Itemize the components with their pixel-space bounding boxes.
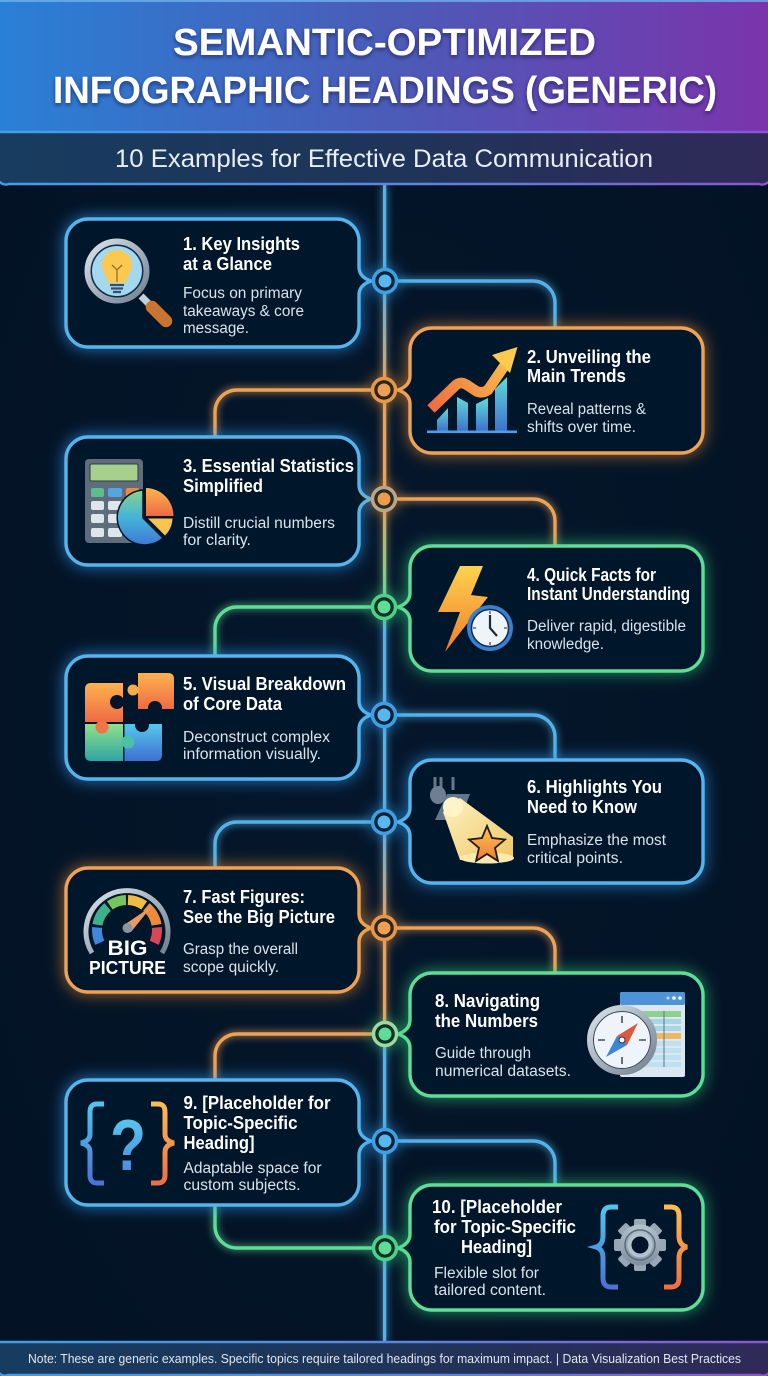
icon: big picture gauge: BIG	[108, 936, 148, 960]
heading 7: See the Big Picture	[183, 906, 335, 927]
heading 8: 8. Navigating	[435, 990, 540, 1011]
heading 8: the Numbers	[435, 1010, 538, 1031]
connector: 5 to 6	[397, 715, 555, 760]
footer band: Note: These are generic examples. Specific topics require tailored headings for maximum impact. | Data Visualization Best Practices	[28, 1351, 741, 1366]
heading 6: Need to Know	[527, 796, 638, 817]
connector: 2 to 3	[215, 390, 372, 437]
connector: 9 to 10	[397, 1141, 555, 1185]
central timeline spine	[383, 185, 386, 1342]
heading 2	[527, 346, 651, 386]
node 2	[372, 378, 396, 402]
header banner	[0, 0, 768, 132]
body 1	[183, 285, 304, 337]
card 4	[398, 546, 703, 671]
heading 1: 1. Key Insights	[183, 233, 300, 254]
subtitle band: 10 Examples for Effective Data Communication	[115, 145, 653, 173]
connector: 7 to 8	[397, 928, 555, 973]
connector: 6 to 7	[215, 822, 372, 868]
heading 2: Main Trends	[527, 365, 626, 386]
branch connectors	[215, 281, 555, 1248]
card 6	[398, 760, 703, 883]
title: INFOGRAPHIC HEADINGS (GENERIC)	[53, 70, 717, 112]
body 8: Guide through	[435, 1045, 531, 1062]
card 5	[66, 656, 371, 779]
body 7: Grasp the overall	[183, 941, 298, 958]
body 9	[184, 1160, 322, 1194]
node 10	[374, 1236, 396, 1260]
node 7	[372, 916, 396, 940]
body 2: Reveal patterns &	[527, 401, 647, 418]
node 9	[374, 1130, 396, 1152]
body 2	[527, 401, 647, 436]
body 7	[183, 941, 298, 976]
icon: gear in braces	[596, 1207, 687, 1287]
heading 10: Heading]	[461, 1236, 532, 1257]
heading 6	[527, 776, 662, 817]
heading 5: 5. Visual Breakdown	[183, 673, 346, 694]
heading 3: Simplified	[183, 475, 263, 496]
body 10: Flexible slot for	[434, 1265, 539, 1282]
card 10	[398, 1185, 703, 1310]
heading 7	[183, 886, 335, 927]
heading 10	[432, 1196, 576, 1257]
card 3	[66, 437, 371, 565]
body 3: Distill crucial numbers	[183, 515, 335, 532]
heading 2: 2. Unveiling the	[527, 346, 651, 367]
card 7	[66, 868, 371, 992]
body 5: Deconstruct complex	[183, 729, 330, 746]
icon: big picture gauge: PICTURE	[89, 958, 166, 978]
body 9: Adaptable space for	[184, 1160, 322, 1177]
icon: big picture gauge	[86, 891, 168, 978]
heading 1: at a Glance	[183, 253, 272, 274]
heading 7: 7. Fast Figures:	[183, 886, 305, 907]
card 8	[398, 973, 703, 1096]
title: SEMANTIC-OPTIMIZED	[173, 22, 596, 64]
heading 10: 10. [Placeholder	[432, 1196, 562, 1217]
body 4: Deliver rapid, digestible	[527, 618, 686, 635]
connector: 1 to 2	[397, 281, 555, 328]
heading 9: Topic-Specific	[184, 1112, 298, 1133]
heading 5: of Core Data	[183, 693, 283, 714]
card 9	[66, 1080, 371, 1205]
body 9: custom subjects.	[184, 1177, 300, 1194]
heading 6: 6. Highlights You	[527, 776, 662, 797]
icon: puzzle pieces	[85, 673, 174, 761]
icon: spotlight and star	[430, 777, 514, 864]
body 5: information visually.	[183, 746, 321, 763]
body 6	[527, 832, 667, 867]
connector: 9 to node 10	[215, 1205, 372, 1248]
icon: rising trend chart	[427, 347, 518, 433]
node 1	[374, 270, 396, 292]
heading 4: Instant Understanding	[527, 583, 690, 604]
icon: question mark in braces: ?	[110, 1106, 146, 1186]
heading 3	[183, 455, 354, 496]
heading 9: 9. [Placeholder for	[184, 1092, 330, 1113]
body 4	[527, 618, 686, 653]
heading 4: 4. Quick Facts for	[527, 564, 656, 585]
body 10: tailored content.	[434, 1282, 546, 1299]
heading 5	[183, 673, 346, 714]
connector: 8 to 9	[215, 1034, 372, 1080]
connector: 3 to 4	[397, 499, 555, 546]
body 6: critical points.	[527, 850, 623, 867]
icon: calculator and pie chart	[85, 459, 174, 545]
body 1: takeaways & core	[183, 303, 304, 320]
body 3	[183, 515, 335, 549]
body 1: Focus on primary	[183, 285, 302, 302]
icon: lightning bolt and clock	[438, 566, 513, 652]
body 1: message.	[183, 320, 249, 337]
heading 1	[183, 233, 300, 274]
heading 8	[435, 990, 540, 1031]
node 6	[372, 810, 396, 834]
node 5	[372, 704, 396, 726]
node 4	[372, 596, 396, 618]
heading 4	[527, 564, 690, 604]
icon: magnifier with light bulb	[88, 242, 166, 321]
body 3: for clarity.	[183, 532, 251, 549]
node 8	[374, 1022, 396, 1046]
body 5	[183, 729, 330, 763]
timeline nodes	[372, 270, 396, 1260]
card 2	[398, 328, 703, 453]
body 8	[435, 1045, 571, 1080]
body 2: shifts over time.	[527, 419, 636, 436]
title	[53, 22, 717, 112]
body 6: Emphasize the most	[527, 832, 667, 849]
body 4: knowledge.	[527, 636, 604, 653]
heading 9	[184, 1092, 330, 1153]
heading 10: for Topic-Specific	[434, 1216, 576, 1237]
icon: question mark in braces	[81, 1104, 174, 1186]
icon: compass and spreadsheet	[590, 992, 685, 1077]
node 3	[372, 488, 396, 510]
footer band	[0, 1342, 768, 1376]
card 1	[66, 219, 371, 347]
connector: 4 to 5	[215, 607, 372, 656]
heading 9: Heading]	[184, 1132, 254, 1153]
body 7: scope quickly.	[183, 959, 279, 976]
body 10	[434, 1265, 546, 1299]
heading 3: 3. Essential Statistics	[183, 455, 354, 476]
body 8: numerical datasets.	[435, 1063, 571, 1080]
subtitle band	[0, 132, 768, 185]
